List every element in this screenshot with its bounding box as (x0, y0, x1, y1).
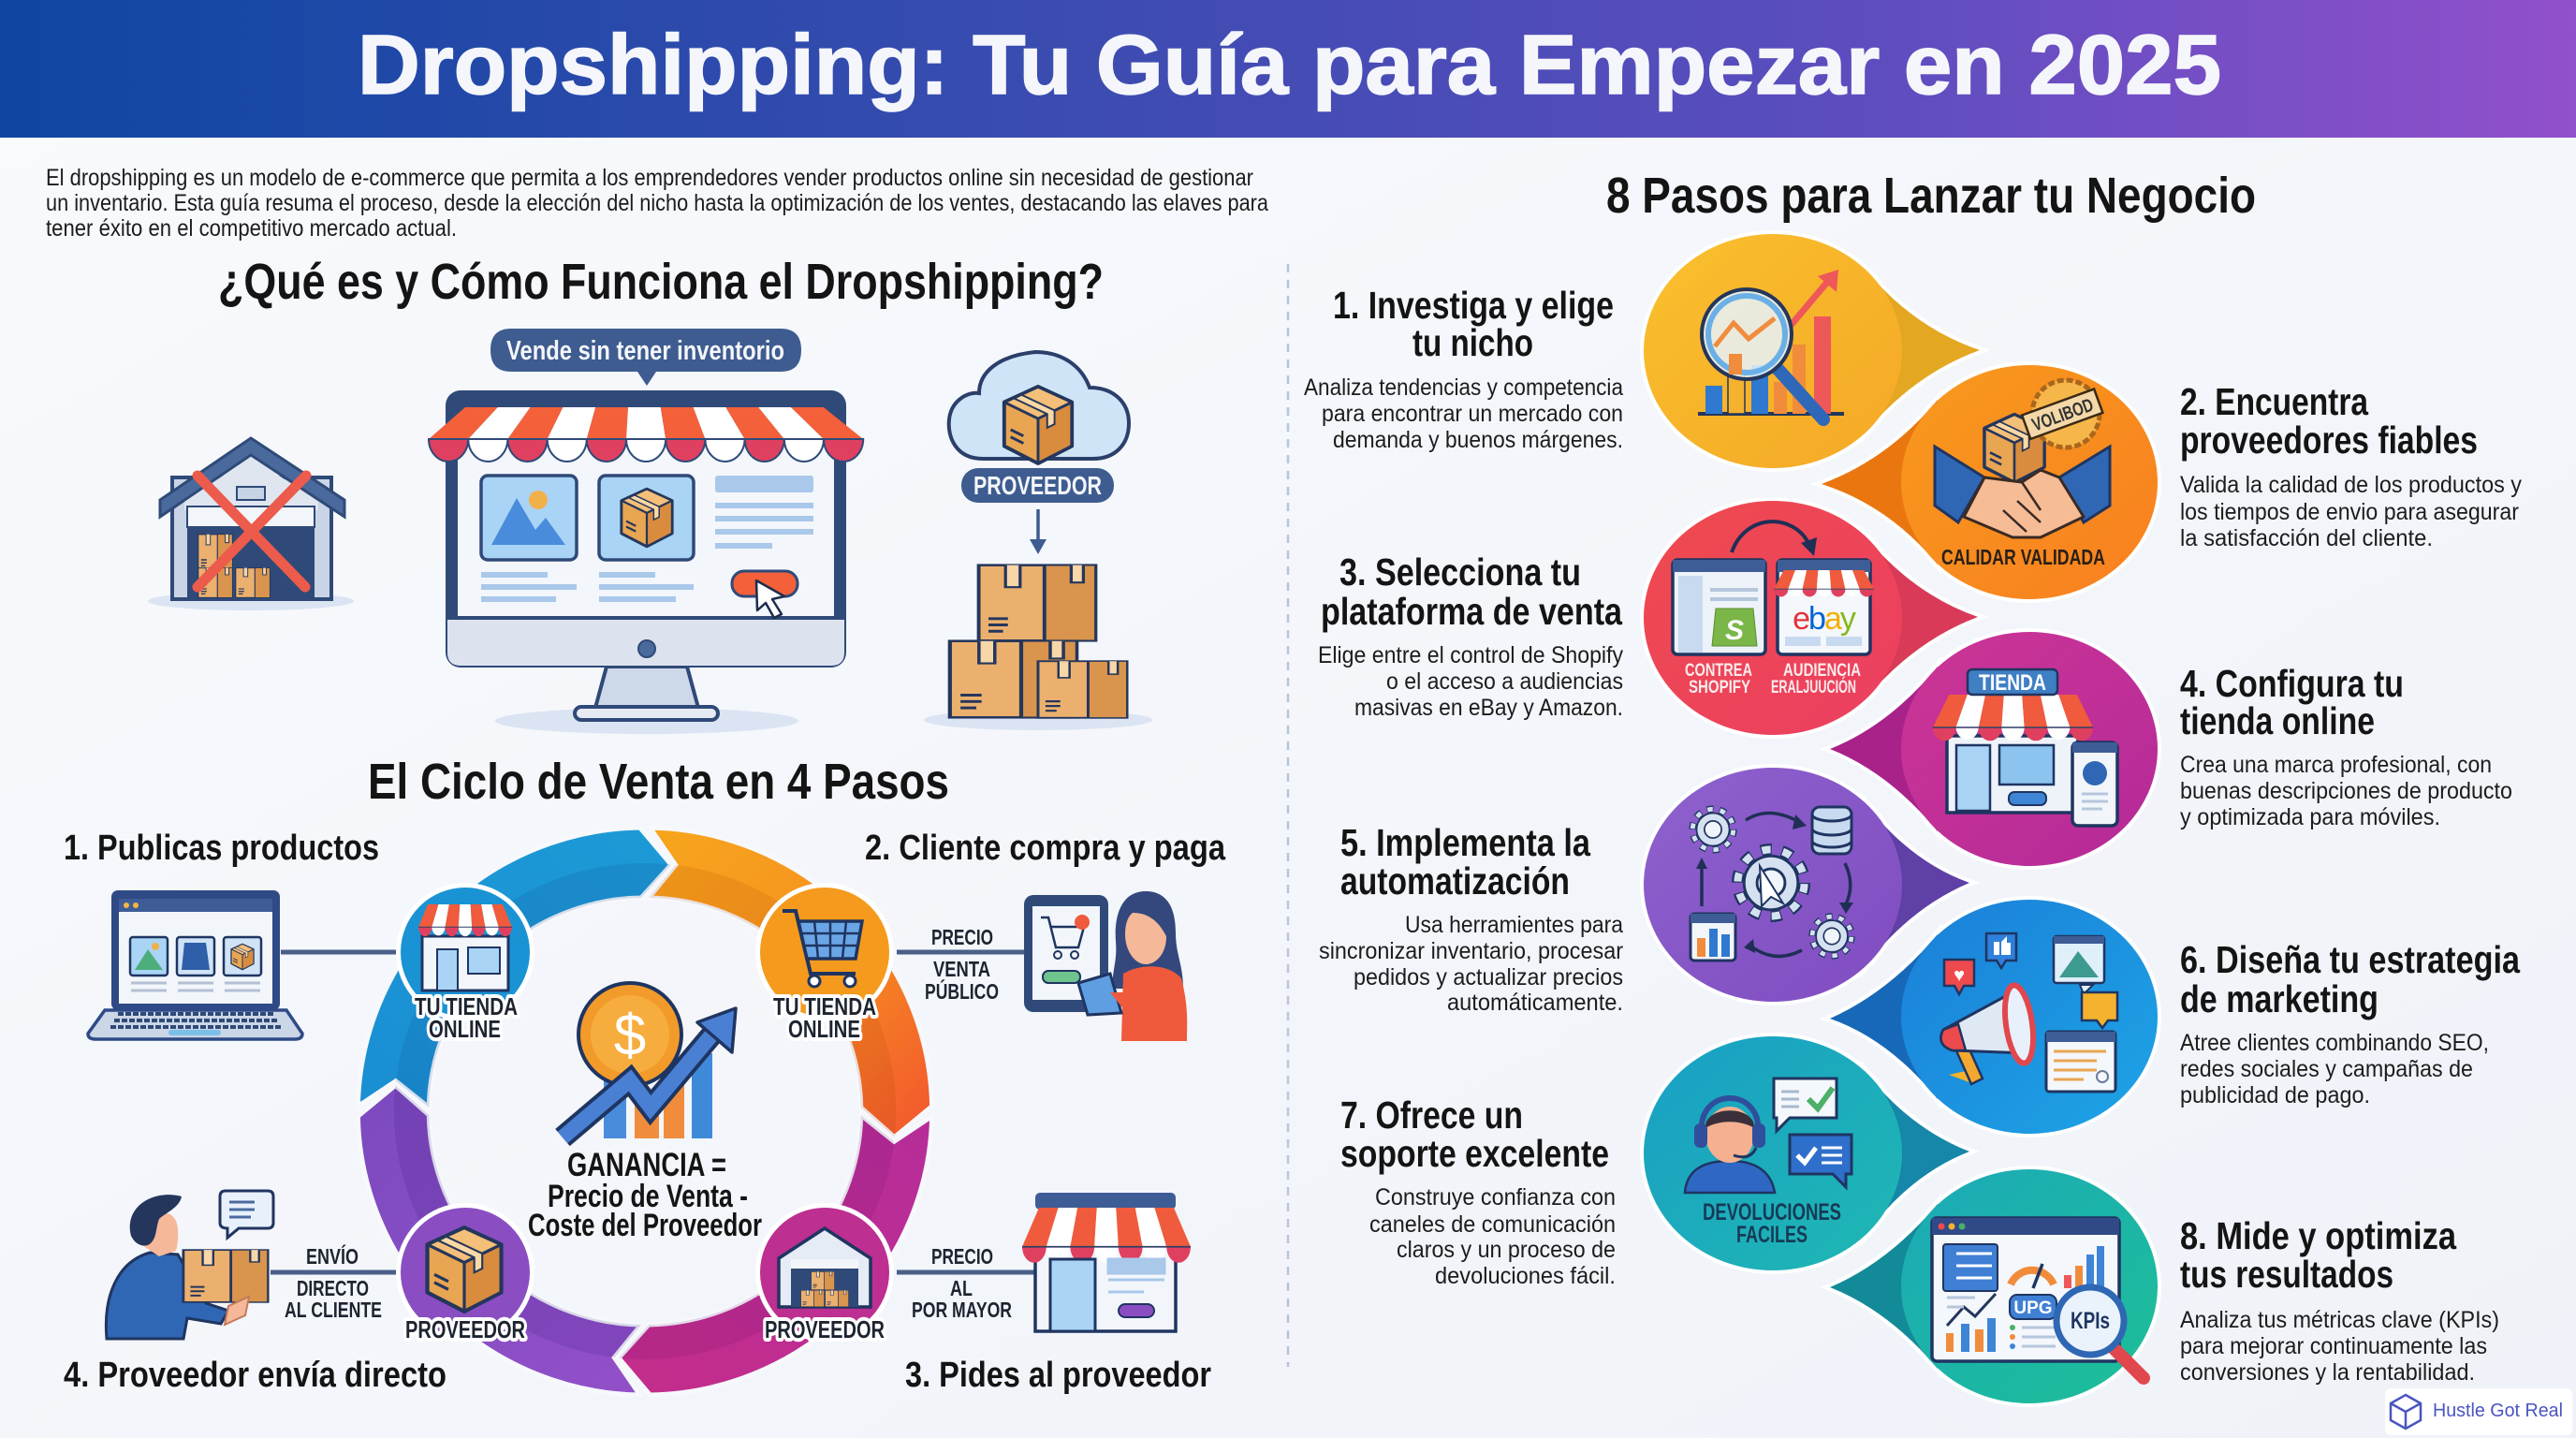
callout: vende sin inventario: Vende sin tener inventorio (506, 336, 784, 366)
icon: curved arrow (1732, 521, 1817, 556)
labels: platforms: ERALJUUCIÓN (1771, 677, 1856, 697)
step 6 text: 6. Diseña tu estrategia (2180, 938, 2521, 981)
step 7 bubble (1640, 1033, 1969, 1274)
step 8 bubble (1830, 1166, 2161, 1407)
intro paragraph (46, 165, 1268, 242)
step label 4: 4. Proveedor envía directo (64, 1356, 446, 1395)
icon: support agent (1685, 1078, 1852, 1193)
icon: automation gears (1690, 807, 1853, 961)
step 6 bubble (1830, 896, 2161, 1137)
browser window (2046, 1032, 2115, 1092)
icon: chart with magnifier (1698, 270, 1844, 419)
step 8 text: para mejorar continuamente las (2180, 1333, 2487, 1359)
node: proveedor box (purple) (396, 1203, 534, 1343)
step 5 text: pedidos y actualizar precios (1354, 964, 1623, 990)
icon: analytics dashboard (1932, 1218, 2144, 1378)
icon: crossed-out warehouse (148, 438, 354, 610)
label: devoluciones faciles (1703, 1199, 1841, 1248)
text: envio directo al cliente: AL CLIENTE (285, 1298, 382, 1322)
step 4 text: y optimizada para móviles. (2180, 804, 2440, 830)
heading: que es: ¿Qué es y Cómo Funciona el Dropshipping? (218, 254, 1104, 310)
node: proveedor warehouse (magenta) (755, 1203, 894, 1343)
node: cart tu tienda online (orange): TU TIENDA (773, 992, 876, 1020)
step 8 text: tus resultados (2180, 1253, 2393, 1296)
intro paragraph: tener éxito en el competitivo mercado actual. (46, 215, 457, 242)
chart: sales cycle ring (358, 828, 932, 1395)
step 7 text: 7. Ofrece un (1340, 1093, 1523, 1137)
step 7 text: soporte excelente (1340, 1132, 1609, 1175)
step 4 bubble (1830, 628, 2161, 870)
step 2 text: los tiempos de envio para asegurar (2180, 499, 2519, 525)
step 7 text: Construye confianza con (1375, 1184, 1616, 1211)
step 4 text: Crea una marca profesional, con (2180, 752, 2492, 778)
step 4 text: tienda online (2180, 699, 2375, 742)
step 8 text (2180, 1214, 2499, 1386)
buy button with cursor (732, 571, 798, 618)
arrow: proveedor to boxes (1030, 509, 1046, 554)
step 2 text: 2. Encuentra (2180, 380, 2369, 423)
step 1 text: tu nicho (1412, 321, 1533, 364)
step 6 text: de marketing (2180, 977, 2378, 1020)
product card image (481, 476, 577, 560)
node: tu tienda online (blue): TU TIENDA (415, 992, 518, 1020)
logo badge: Hustle Got Real (2433, 1401, 2563, 1421)
store awning (429, 407, 863, 462)
center: profit chart: $ (614, 1004, 646, 1068)
text: precio venta publico: PÚBLICO (925, 978, 999, 1004)
text: precio venta publico: VENTA (933, 957, 990, 981)
step 7 text: claros y un proceso de (1397, 1237, 1616, 1263)
icon: shopify window: S (1725, 615, 1744, 646)
intro paragraph: El dropshipping es un modelo de e-commerce que permita a los emprendedores vender productos online sin necesidad de gestionar (46, 165, 1253, 191)
product card box (599, 476, 694, 560)
text: precio al por mayor (912, 1244, 1012, 1322)
social bubbles (1944, 933, 2117, 1028)
icon: stacked boxes (924, 565, 1152, 730)
logo badge (2385, 1388, 2572, 1435)
ring segment purple (358, 1085, 641, 1395)
text: envio directo al cliente: ENVÍO (306, 1243, 359, 1269)
icon: analytics dashboard: UPG (2013, 1299, 2053, 1318)
step 1 text: Analiza tendencias y competencia (1304, 374, 1623, 401)
step 3 text: Elige entre el control de Shopify (1318, 642, 1623, 668)
step 5 text: automáticamente. (1447, 990, 1623, 1016)
node: proveedor warehouse (magenta): PROVEEDOR (765, 1315, 885, 1343)
center: profit formula: Precio de Venta - (548, 1179, 748, 1214)
step 1 text: 1. Investiga y elige (1333, 284, 1614, 327)
step 3 bubble (1640, 497, 1978, 739)
labels: platforms: CONTREA (1685, 661, 1752, 681)
step 5 text: Usa herramientes para (1405, 912, 1623, 938)
icon: megaphone (1941, 933, 2117, 1092)
step 6 text: Atree clientes combinando SEO, (2180, 1030, 2489, 1056)
title: Dropshipping: Tu Guía para Empezar en 2025 (358, 19, 2221, 112)
icon: supplier cloud (949, 352, 1129, 463)
step 5 text (1319, 821, 1623, 1016)
text: precio al por mayor: PRECIO (931, 1244, 993, 1269)
step 7 text (1340, 1093, 1616, 1289)
node: tu tienda online (blue) (396, 883, 534, 1043)
step 6 text: publicidad de pago. (2180, 1082, 2370, 1108)
icon: monitor storefront (429, 390, 863, 734)
step 7 text: caneles de comunicación (1369, 1211, 1616, 1238)
center: profit formula: Coste del Proveedor (528, 1208, 762, 1243)
icon: customer with tablet (1024, 891, 1187, 1041)
callout: vende sin inventario (490, 329, 801, 386)
step 5 text: 5. Implementa la (1340, 821, 1591, 864)
icon: handshake with box: VOLIBOD (2029, 395, 2096, 436)
step label 2: 2. Cliente compra y paga (865, 829, 1226, 868)
icon: online store (1933, 669, 2117, 826)
label: devoluciones faciles: FACILES (1736, 1222, 1808, 1248)
social bubbles: ♥ (1954, 965, 1965, 986)
icon: online store: TIENDA (1979, 670, 2046, 696)
step label 1: 1. Publicas productos (64, 829, 379, 868)
node: proveedor box (purple): PROVEEDOR (405, 1315, 525, 1343)
text: precio venta publico: PRECIO (931, 925, 993, 949)
step 1 bubble (1640, 230, 1980, 472)
step label 3: 3. Pides al proveedor (905, 1356, 1211, 1395)
speech bubble (220, 1191, 273, 1238)
label: proveedor pill: PROVEEDOR (973, 471, 1102, 500)
step 3 text: 3. Selecciona tu (1339, 550, 1581, 594)
center: profit formula (528, 1147, 762, 1243)
step 6 text (2180, 938, 2521, 1108)
step 3 text: o el acceso a audiencias (1386, 668, 1623, 695)
icon: wholesale store (1022, 1193, 1191, 1331)
step 2 text (2180, 380, 2522, 551)
step 8 text: Analiza tus métricas clave (KPIs) (2180, 1307, 2499, 1333)
step 8 text: conversiones y la rentabilidad. (2180, 1359, 2475, 1386)
text: precio venta publico (925, 925, 999, 1004)
ring segment blue (358, 828, 671, 1108)
node: tu tienda online (blue): ONLINE (429, 1015, 501, 1043)
ring segment magenta (619, 1115, 932, 1395)
text: envio directo al cliente (285, 1243, 382, 1322)
step 1 text: para encontrar un mercado con (1322, 401, 1623, 427)
product text lines (481, 476, 813, 602)
step 3 text: masivas en eBay y Amazon. (1354, 695, 1623, 721)
step 8 text: 8. Mide y optimiza (2180, 1214, 2457, 1257)
step 2 text: la satisfacción del cliente. (2180, 525, 2433, 551)
icon: delivery person (106, 1191, 273, 1339)
icon: laptop (88, 890, 302, 1039)
intro paragraph: un inventario. Esta guía resuma el proceso, desde la elección del nicho hasta la optimización de los ventes, destacando las elaves para (46, 190, 1268, 216)
step 5 bubble (1640, 764, 1969, 1005)
ring segment orange (649, 828, 932, 1137)
labels: platforms (1685, 661, 1861, 697)
label: calidad validada: CALIDAR VALIDADA (1941, 545, 2105, 569)
text: envio directo al cliente: DIRECTO (297, 1276, 369, 1300)
step 2 text: proveedores fiables (2180, 418, 2478, 462)
step 5 text: automatización (1340, 859, 1570, 902)
icon: analytics dashboard: KPIs (2071, 1308, 2110, 1334)
text: precio al por mayor: POR MAYOR (912, 1298, 1012, 1322)
icon: ebay store window (1774, 560, 1874, 654)
step 7 text: devoluciones fácil. (1435, 1263, 1616, 1289)
center: profit chart (563, 983, 736, 1138)
label: proveedor pill (961, 468, 1114, 503)
label: devoluciones faciles: DEVOLUCIONES (1703, 1199, 1841, 1225)
icon: handshake with box (1935, 380, 2110, 537)
step 1 text: demanda y buenos márgenes. (1333, 427, 1623, 453)
connector lines (271, 952, 1034, 1272)
labels: platforms: AUDIENCIA (1783, 661, 1861, 681)
step 5 text: sincronizar inventario, procesar (1319, 938, 1623, 964)
node: cart tu tienda online (orange) (755, 883, 894, 1043)
step 2 bubble (1822, 361, 2161, 603)
icon: ebay store window: ebay (1793, 601, 1856, 637)
text: precio al por mayor: AL (950, 1276, 973, 1300)
center: profit formula: GANANCIA = (567, 1147, 726, 1183)
step 4 text (2180, 662, 2512, 830)
heading: ciclo de venta: El Ciclo de Venta en 4 Pasos (368, 754, 949, 810)
step 3 text (1318, 550, 1623, 721)
step 6 text: redes sociales y campañas de (2180, 1056, 2473, 1082)
step 1 text (1304, 284, 1623, 453)
step 3 text: plataforma de venta (1321, 590, 1623, 633)
node: cart tu tienda online (orange): ONLINE (788, 1015, 860, 1043)
labels: platforms: SHOPIFY (1689, 678, 1750, 697)
heading: 8 pasos: 8 Pasos para Lanzar tu Negocio (1606, 168, 2256, 224)
header banner (0, 0, 2576, 138)
step 4 text: buenas descripciones de producto (2180, 778, 2512, 804)
icon: shopify window (1673, 560, 1765, 654)
step 4 text: 4. Configura tu (2180, 662, 2404, 705)
step 2 text: Valida la calidad de los productos y (2180, 472, 2522, 498)
